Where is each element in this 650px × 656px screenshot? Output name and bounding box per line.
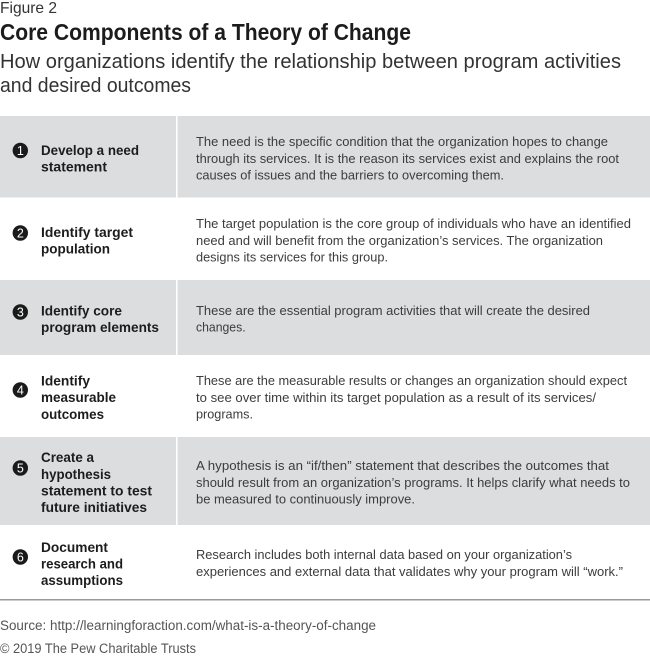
title: Core Components of a Theory of Change [0, 19, 411, 45]
icon: number 6 [13, 549, 28, 565]
heading: create a hypothesis statement: hypothesis [41, 466, 111, 482]
panel: row 4 measurable outcomes [13, 372, 627, 422]
icon: number 3: 3 [17, 306, 24, 320]
heading: identify measurable outcomes [41, 372, 116, 422]
icon: number 4 [13, 382, 28, 398]
heading: identify core program elements [41, 302, 159, 335]
subtitle: How organizations identify the relationship between program activities [0, 51, 621, 73]
heading: identify target population [41, 224, 133, 256]
heading: identify target population: Identify target [41, 224, 133, 240]
text: research description [196, 547, 623, 579]
heading: identify measurable outcomes: measurable [41, 389, 116, 405]
icon: number 6: 6 [17, 550, 24, 564]
copyright: © 2019 The Pew Charitable Trusts [0, 641, 196, 656]
heading: document research and assumptions: assumptions [41, 572, 123, 588]
text: measurable outcomes description [196, 373, 627, 422]
heading: identify measurable outcomes: outcomes [41, 406, 104, 422]
icon: number 2 [13, 225, 28, 241]
heading: document research and assumptions: Document [41, 539, 108, 555]
text: need description: through its services. It is the reason its services exist and explains the root [196, 151, 619, 166]
heading: identify core program elements: Identify core [41, 302, 122, 318]
source note: Source: http://learningforaction.com/what-is-a-theory-of-change [0, 618, 376, 633]
heading: document research and assumptions [41, 539, 123, 588]
text: need description: causes of issues and the barriers to overcoming them. [196, 168, 504, 182]
icon: number 2: 2 [17, 226, 24, 240]
panel: row 6 research and assumptions [13, 539, 623, 588]
heading: identify core program elements: program elements [41, 319, 159, 335]
text: research description: experiences and external data that validates why your program will “work.” [196, 564, 623, 579]
text: hypothesis description: should result from an organization’s programs. It helps clarify what needs to [196, 475, 630, 490]
text: target population description: designs its services for this group. [196, 250, 388, 264]
subtitle [0, 51, 621, 97]
panel: row 2 target population [13, 216, 631, 264]
text: need description: The need is the specific condition that the organization hopes to change [196, 134, 608, 149]
heading: identify target population: population [41, 240, 110, 256]
panel: row 5 hypothesis statement [0, 437, 650, 525]
icon: number 1 [13, 143, 28, 158]
icon: number 5: 5 [17, 462, 24, 476]
text: research description: Research includes both internal data based on your organization’s [196, 547, 572, 562]
heading: develop a need statement [41, 142, 139, 174]
heading: create a hypothesis statement: Create a [41, 449, 94, 465]
subtitle: and desired outcomes [0, 75, 191, 97]
heading: create a hypothesis statement: future initiatives [41, 499, 147, 515]
heading: develop a need statement: statement [41, 158, 107, 174]
heading: create a hypothesis statement: statement to test [41, 482, 152, 498]
text: measurable outcomes description: These are the measurable results or changes an organization should expect [196, 373, 627, 388]
text: need description [196, 134, 619, 182]
heading: identify measurable outcomes: Identify [41, 372, 90, 388]
text: target population description: The target population is the core group of individuals who have an identified [196, 216, 631, 231]
text: core program description: changes. [196, 320, 246, 334]
figure label: Figure 2 [0, 0, 57, 17]
icon: number 3 [13, 304, 28, 320]
heading: create a hypothesis statement [41, 449, 152, 515]
text: hypothesis description: A hypothesis is an “if/then” statement that describes the outcomes that [196, 458, 609, 473]
heading: develop a need statement: Develop a need [41, 142, 139, 158]
text: core program description: These are the essential program activities that will create the desired [196, 303, 590, 318]
text: hypothesis description [196, 458, 630, 506]
icon: number 5 [13, 460, 28, 476]
panel: row 3 core program elements [0, 280, 650, 355]
text: target population description [196, 216, 631, 264]
text: core program description [196, 303, 590, 334]
icon: number 1: 1 [17, 144, 24, 158]
icon: number 4: 4 [17, 384, 24, 398]
panel: row 1 need statement [0, 116, 650, 198]
text: hypothesis description: be measured to continuously improve. [196, 492, 415, 506]
text: target population description: need and will benefit from the organization’s services. The organization [196, 233, 603, 248]
text: measurable outcomes description: programs. [196, 406, 253, 422]
text: measurable outcomes description: to see over time within its target population as a result of its services/ [196, 390, 596, 405]
heading: document research and assumptions: research and [41, 556, 123, 572]
